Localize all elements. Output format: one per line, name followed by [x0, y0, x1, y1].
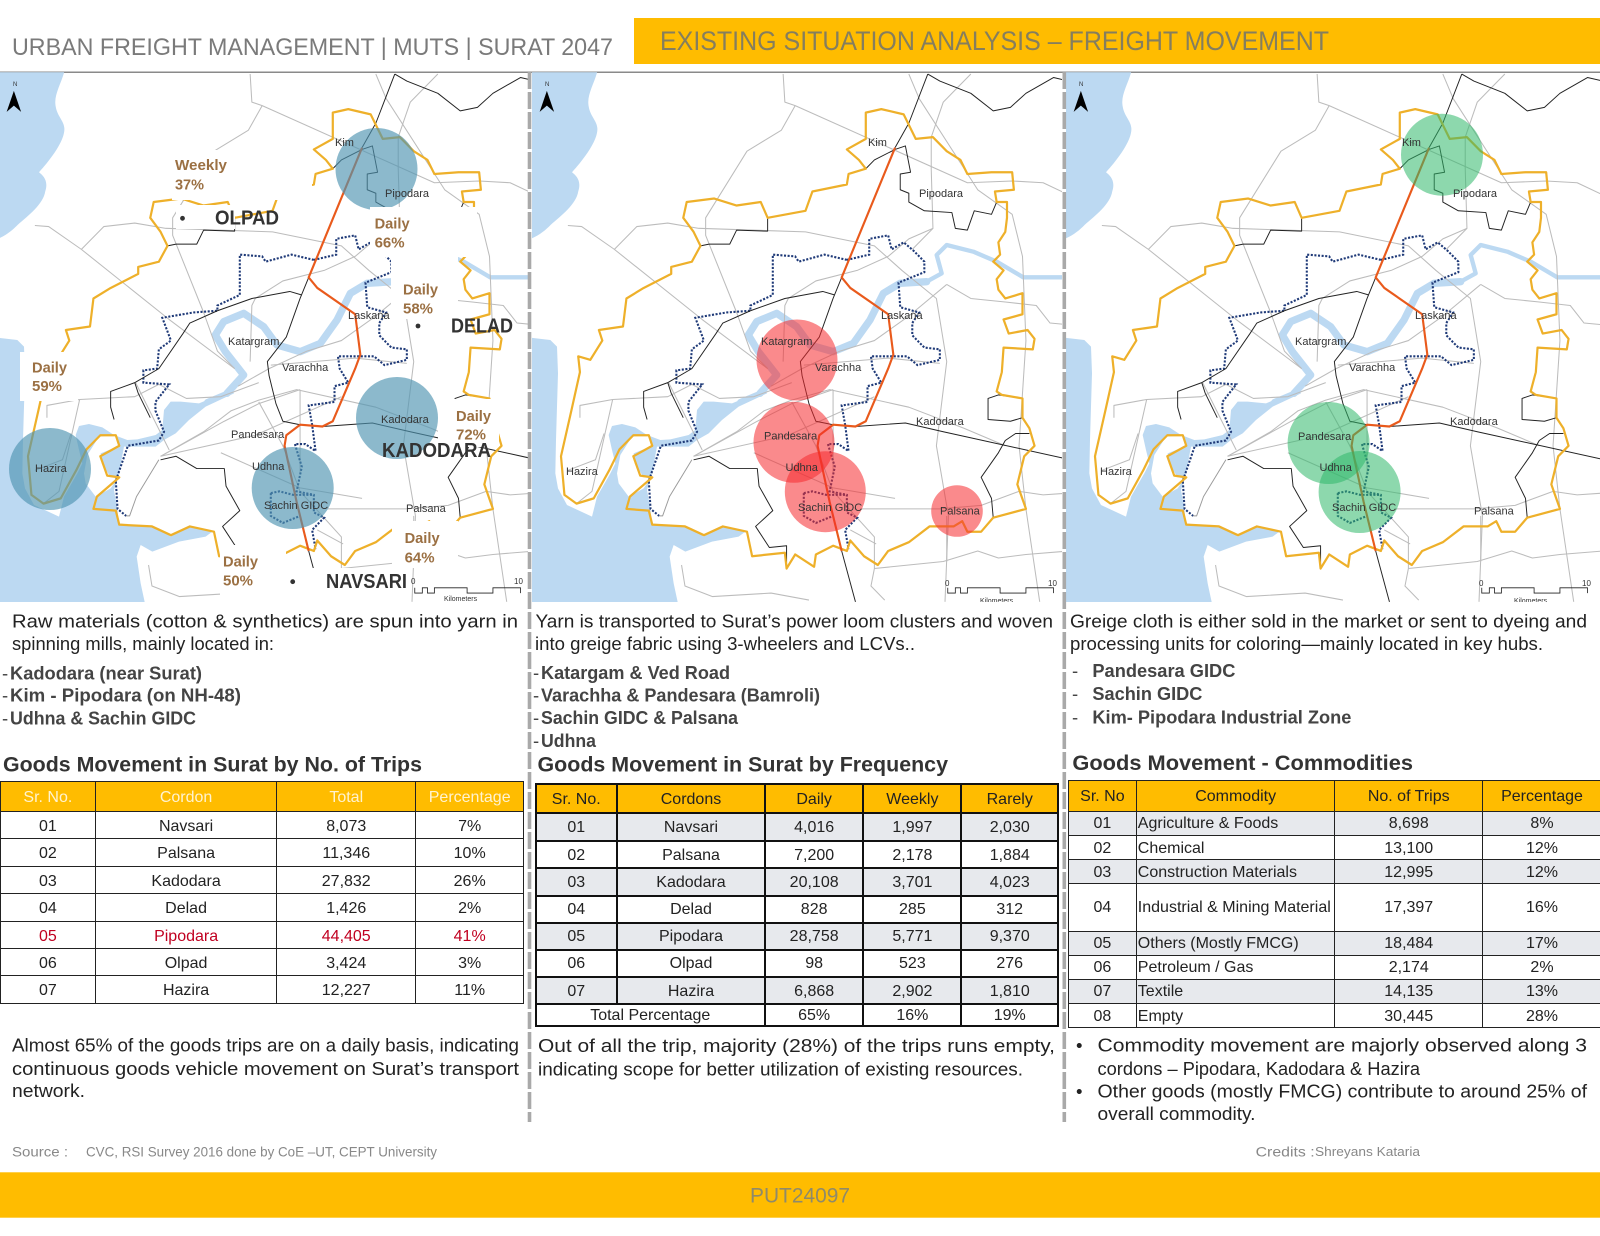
- map labels: [35, 137, 447, 515]
- frequency labels: 64%: [405, 550, 435, 567]
- table: goods movement by frequency: 1,810: [990, 983, 1030, 1000]
- cordon names: KADODARA: [382, 440, 491, 462]
- table: goods movement by frequency: 06: [567, 955, 585, 972]
- section header band: EXISTING SITUATION ANALYSIS – FREIGHT MOVEMENT: [660, 26, 1329, 56]
- scale bar text: [1479, 580, 1591, 602]
- frequency labels: Daily: [456, 408, 492, 425]
- scale bar text: 0: [1479, 579, 1484, 588]
- table: goods movement by trips: 02: [39, 845, 57, 862]
- text block: daily trips note: continuous goods vehicle movement on Surat’s transport: [12, 1058, 519, 1079]
- list: weaving locations: Katargam & Ved Road: [541, 662, 730, 683]
- frequency labels: 66%: [375, 234, 405, 252]
- list: weaving locations: -: [533, 707, 539, 728]
- table: goods movement by frequency: Navsari: [664, 819, 718, 836]
- text block: empty trips note: Out of all the trip, majority (28%) of the trips runs empty,: [538, 1035, 1055, 1056]
- table: goods movement by frequency: 4,016: [794, 819, 834, 836]
- map labels: Hazira: [35, 463, 68, 475]
- map labels: Kadodara: [1450, 416, 1499, 428]
- text block: greige cloth: processing units for coloring—mainly located in key hubs.: [1070, 633, 1543, 654]
- list: processing hubs: Kim- Pipodara Industrial Zone: [1092, 706, 1351, 728]
- map labels: Pipodara: [919, 188, 964, 200]
- map labels: Laskana: [1415, 310, 1457, 322]
- table: goods movement by trips: 27,832: [322, 873, 371, 890]
- table: goods movement by frequency: 20,108: [790, 874, 839, 891]
- title: URBAN FREIGHT MANAGEMENT | MUTS | SURAT 2047: [12, 34, 613, 61]
- panel: map 2 weaving clusters: N: [545, 82, 549, 88]
- scale bar text: 10: [514, 577, 523, 586]
- table: goods movement by frequency: 98: [805, 955, 823, 972]
- map labels: Katargram: [228, 336, 279, 348]
- list: spinning locations: -: [2, 707, 8, 728]
- footer band: PUT24097: [750, 1185, 850, 1208]
- scale bar text: 10: [1582, 579, 1591, 588]
- table: commodities: 17,397: [1384, 899, 1433, 916]
- frequency labels: Weekly: [175, 157, 228, 174]
- table: goods movement by frequency: 276: [996, 955, 1023, 972]
- frequency labels: 37%: [175, 176, 204, 194]
- map labels: [566, 137, 981, 518]
- table: goods movement by frequency: 1,884: [990, 847, 1030, 864]
- table: goods movement by trips: 44,405: [322, 928, 371, 945]
- table: goods movement by trips: 04: [39, 900, 57, 917]
- table: commodities: Industrial & Mining Material: [1138, 899, 1331, 916]
- map labels: Laskana: [881, 310, 923, 322]
- table: commodities: No. of Trips: [1368, 788, 1450, 805]
- table: goods movement by trips: 41%: [454, 928, 486, 945]
- map labels: Kim: [868, 137, 887, 149]
- table: commodities: 13%: [1526, 983, 1558, 1000]
- table: goods movement by frequency: 285: [899, 901, 926, 918]
- table: goods movement by frequency: 03: [567, 874, 585, 891]
- table: goods movement by frequency: Delad: [670, 901, 712, 918]
- text block: greige cloth: Greige cloth is either sold in the market or sent to dyeing and: [1070, 611, 1587, 632]
- map labels: Hazira: [566, 466, 599, 478]
- table: goods movement by frequency: Palsana: [662, 847, 720, 864]
- table: goods movement by trips: 01: [39, 818, 57, 835]
- list: weaving locations: -: [533, 730, 539, 751]
- table: goods movement by frequency: Kadodara: [656, 874, 726, 891]
- panel: map 1 frequency by cordon: [0, 72, 544, 607]
- map labels: Kadodara: [916, 416, 965, 428]
- table: goods movement by frequency: Sr. No.: [552, 791, 601, 808]
- table: commodities: 02: [1094, 840, 1111, 857]
- map labels: Kadodara: [381, 414, 430, 426]
- table: goods movement by trips: 26%: [454, 873, 486, 890]
- scale bar text: [411, 578, 523, 601]
- text block: empty trips note: indicating scope for better utilization of existing resources.: [538, 1059, 1023, 1080]
- cordon names: NAVSARI: [326, 571, 407, 593]
- text block: commodity notes: •: [1076, 1035, 1082, 1056]
- table: commodities: 13,100: [1384, 840, 1433, 857]
- list: processing hubs: -: [1072, 706, 1078, 728]
- map labels: Varachha: [815, 362, 862, 374]
- table: goods movement by frequency: 1,997: [892, 819, 932, 836]
- table: goods movement by frequency: Daily: [796, 791, 832, 808]
- text block: empty trips note: [538, 1035, 1055, 1080]
- cordon names: OLPAD: [215, 208, 279, 230]
- list: weaving locations: [533, 662, 820, 751]
- credits: Credits :: [1256, 1144, 1315, 1160]
- frequency labels: 58%: [403, 301, 433, 318]
- table: goods movement by frequency: 01: [567, 819, 585, 836]
- credits: Shreyans Kataria: [1315, 1144, 1421, 1159]
- map labels: Udhna: [252, 461, 285, 473]
- table: goods movement by frequency: 312: [996, 901, 1023, 918]
- text block: commodity notes: Other goods (mostly FMCG) contribute to around 25% of: [1098, 1081, 1588, 1102]
- map labels: Pandesara: [231, 429, 285, 441]
- panel: map 3 processing hubs: [1054, 72, 1600, 607]
- map labels: Kim: [1402, 137, 1421, 149]
- heading: trips table: Goods Movement in Surat by No. of Trips: [3, 753, 422, 777]
- table: commodities: 03: [1094, 864, 1111, 881]
- credits: [1256, 1144, 1421, 1160]
- table: goods movement by frequency: Pipodara: [659, 928, 723, 945]
- table: goods movement by trips: Cordon: [160, 788, 212, 806]
- table: commodities: Commodity: [1195, 788, 1276, 805]
- table: goods movement by frequency: 04: [567, 901, 585, 918]
- table: commodities: Construction Materials: [1138, 864, 1297, 881]
- table: goods movement by frequency: 02: [567, 847, 585, 864]
- table: goods movement by frequency: 07: [567, 983, 585, 1000]
- green hub circles: [1288, 114, 1483, 533]
- map labels: Sachin GIDC: [1332, 502, 1396, 514]
- table: goods movement by frequency: 523: [899, 955, 926, 972]
- white label backgrounds: [20, 150, 499, 602]
- table: goods movement by frequency: 5,771: [892, 928, 932, 945]
- table: goods movement by trips: 11%: [454, 982, 485, 999]
- table: goods movement by frequency: 3,701: [892, 874, 932, 891]
- table: goods movement by frequency: 65%: [798, 1007, 830, 1024]
- table: goods movement by frequency: 05: [567, 928, 585, 945]
- table: goods movement by frequency: 2,178: [892, 847, 932, 864]
- table: goods movement by frequency: Olpad: [670, 955, 712, 972]
- table: goods movement by trips: 2%: [458, 900, 481, 917]
- heading: frequency table: Goods Movement in Surat by Frequency: [538, 753, 948, 777]
- list: weaving locations: -: [533, 662, 539, 683]
- table: goods movement by frequency: [535, 783, 1059, 1027]
- map labels: Hazira: [1100, 466, 1133, 478]
- list: processing hubs: Pandesara GIDC: [1092, 660, 1235, 681]
- heading: commodities table: Goods Movement - Commodities: [1072, 751, 1413, 775]
- text block: commodity notes: [1076, 1035, 1588, 1124]
- frequency labels: 59%: [32, 378, 62, 395]
- table: goods movement by trips: Delad: [165, 900, 207, 917]
- table: goods movement by trips: 06: [39, 955, 57, 972]
- table: goods movement by trips: 03: [39, 873, 57, 890]
- list: spinning locations: -: [2, 662, 8, 683]
- map labels: Katargram: [1295, 336, 1346, 348]
- list: weaving locations: Sachin GIDC & Palsana: [541, 707, 739, 728]
- map labels: Katargram: [761, 336, 812, 348]
- list: weaving locations: Varachha & Pandesara (Bamroli): [541, 684, 820, 706]
- text block: daily trips note: [12, 1035, 519, 1101]
- table: goods movement by trips: [0, 781, 524, 1004]
- frequency labels: Daily: [223, 554, 259, 570]
- table: goods movement by frequency: 7,200: [794, 847, 834, 864]
- map labels: Palsana: [406, 503, 447, 515]
- map labels: Varachha: [282, 362, 329, 374]
- table: commodities: 07: [1094, 983, 1111, 1000]
- map labels: Laskana: [348, 310, 390, 322]
- table: commodities: Others (Mostly FMCG): [1138, 935, 1299, 952]
- table: commodities: 8,698: [1389, 815, 1429, 832]
- table: goods movement by frequency: Total Percentage: [590, 1007, 710, 1024]
- source note: CVC, RSI Survey 2016 done by CoE –UT, CEPT University: [86, 1144, 437, 1160]
- list: processing hubs: Sachin GIDC: [1092, 683, 1202, 704]
- map labels: Palsana: [940, 506, 981, 518]
- table: goods movement by frequency: 828: [801, 901, 828, 918]
- text block: yarn transport: [535, 611, 1053, 654]
- table: goods movement by trips: 12,227: [322, 982, 371, 999]
- table: goods movement by frequency: 6,868: [794, 983, 834, 1000]
- source note: Source :: [12, 1144, 68, 1160]
- list: weaving locations: -: [533, 684, 539, 706]
- table: commodities: Percentage: [1501, 788, 1583, 805]
- map labels: Varachha: [1349, 362, 1396, 374]
- table: goods movement by frequency: Hazira: [668, 983, 714, 1000]
- table: commodities: Empty: [1138, 1008, 1183, 1025]
- frequency labels: Daily: [375, 215, 410, 232]
- table: goods movement by frequency: 2,902: [892, 983, 932, 1000]
- table: goods movement by trips: Navsari: [159, 818, 213, 835]
- section header band: [634, 18, 1600, 64]
- blue cordon circles: [9, 128, 438, 529]
- table: commodities: 08: [1094, 1008, 1111, 1025]
- scale bar text: Kilometers: [1514, 598, 1548, 605]
- table: commodities: Chemical: [1138, 840, 1204, 857]
- list: spinning locations: [2, 662, 241, 728]
- scale bar text: 0: [411, 577, 416, 586]
- table: goods movement by trips: Olpad: [165, 955, 207, 972]
- list: spinning locations: -: [2, 685, 8, 706]
- table: commodities: 14,135: [1384, 983, 1433, 1000]
- cordon names: DELAD: [451, 316, 513, 338]
- list: processing hubs: -: [1072, 683, 1078, 704]
- map labels: Udhna: [786, 462, 819, 474]
- map labels: Sachin GIDC: [264, 500, 328, 512]
- table: commodities: 17%: [1526, 935, 1558, 952]
- table: goods movement by trips: Percentage: [429, 788, 511, 806]
- scale bar text: Kilometers: [980, 598, 1014, 605]
- scale bar text: [945, 580, 1057, 602]
- table: commodities: 2%: [1530, 959, 1554, 976]
- scale bar text: Kilometers: [444, 596, 478, 603]
- table: commodities: Petroleum / Gas: [1138, 959, 1253, 976]
- frequency labels: Daily: [405, 530, 440, 547]
- panel: map 2 weaving clusters: [520, 72, 1077, 607]
- text block: commodity notes: overall commodity.: [1098, 1103, 1256, 1124]
- table: goods movement by trips: 07: [39, 982, 57, 999]
- table: goods movement by trips: Sr. No.: [23, 788, 72, 806]
- table: goods movement by trips: 1,426: [326, 900, 366, 917]
- table: commodities: Sr. No: [1080, 788, 1125, 805]
- red cluster circles: [754, 320, 983, 537]
- table: goods movement by frequency: Weekly: [886, 791, 938, 808]
- cordon names: [180, 208, 513, 593]
- text block: yarn transport: Yarn is transported to Surat’s power loom clusters and woven: [536, 611, 1053, 632]
- table: commodities: 18,484: [1384, 935, 1433, 952]
- text block: yarn transport: into greige fabric using 3-wheelers and LCVs..: [535, 633, 915, 654]
- table: goods movement by trips: 3%: [458, 955, 481, 972]
- text block: raw materials: Raw materials (cotton & synthetics) are spun into yarn in: [12, 611, 518, 632]
- table: goods movement by trips: Total: [329, 788, 363, 806]
- table: commodities: 16%: [1526, 899, 1558, 916]
- table: commodities: 12%: [1526, 864, 1558, 881]
- table: goods movement by trips: Pipodara: [154, 928, 218, 945]
- scale bar text: 0: [945, 579, 950, 588]
- table: goods movement by trips: Hazira: [163, 982, 209, 999]
- map labels: Pipodara: [1453, 188, 1498, 200]
- list: processing hubs: [1072, 660, 1351, 728]
- table: goods movement by frequency: 19%: [994, 1007, 1026, 1024]
- map labels: Kim: [335, 137, 354, 149]
- table: commodities: 2,174: [1389, 959, 1429, 976]
- text block: greige cloth: [1070, 611, 1587, 654]
- text block: daily trips note: Almost 65% of the goods trips are on a daily basis, indicating: [12, 1035, 519, 1056]
- table: goods movement by trips: 11,346: [322, 845, 370, 862]
- table: goods movement by trips: 10%: [454, 845, 486, 862]
- scale bar text: 10: [1048, 579, 1057, 588]
- frequency labels: Daily: [403, 282, 439, 298]
- list: weaving locations: Udhna: [541, 730, 597, 751]
- frequency labels: Daily: [32, 359, 68, 376]
- table: goods movement by trips: 05: [39, 928, 57, 945]
- list: spinning locations: Kadodara (near Surat): [10, 662, 202, 683]
- text block: raw materials: [12, 611, 518, 654]
- footer band: [0, 1172, 1600, 1218]
- map labels: Pipodara: [385, 188, 430, 200]
- text block: commodity notes: cordons – Pipodara, Kadodara & Hazira: [1098, 1058, 1421, 1079]
- table: commodities: 06: [1094, 959, 1111, 976]
- map labels: Udhna: [1320, 462, 1353, 474]
- text block: commodity notes: •: [1076, 1081, 1082, 1102]
- text block: commodity notes: Commodity movement are majorly observed along 3: [1098, 1035, 1587, 1056]
- map labels: [1100, 137, 1515, 518]
- map labels: Palsana: [1474, 506, 1515, 518]
- table: goods movement by frequency: 9,370: [990, 928, 1030, 945]
- map labels: Pandesara: [1298, 431, 1352, 443]
- table: commodities: 05: [1094, 935, 1111, 952]
- table: goods movement by frequency: Cordons: [661, 791, 721, 808]
- table: commodities: [1068, 780, 1600, 1028]
- table: goods movement by trips: Kadodara: [151, 873, 221, 890]
- text block: daily trips note: network.: [12, 1080, 85, 1101]
- table: goods movement by frequency: 2,030: [990, 819, 1030, 836]
- list: spinning locations: Kim - Pipodara (on NH-48): [10, 685, 241, 706]
- panel: map 3 processing hubs: N: [1079, 82, 1083, 88]
- table: goods movement by frequency: Rarely: [987, 791, 1033, 808]
- map labels: Pandesara: [764, 430, 818, 442]
- table: goods movement by frequency: 4,023: [990, 874, 1030, 891]
- table: commodities: 28%: [1526, 1008, 1558, 1025]
- frequency labels: 72%: [456, 427, 486, 444]
- table: goods movement by trips: 7%: [458, 818, 481, 835]
- panel: map 1 frequency by cordon: N: [13, 82, 17, 88]
- table: commodities: 12%: [1526, 840, 1558, 857]
- frequency labels: 50%: [223, 573, 253, 590]
- table: goods movement by frequency: 28,758: [790, 928, 839, 945]
- table: commodities: 30,445: [1384, 1008, 1433, 1025]
- table: goods movement by frequency: 16%: [896, 1007, 928, 1024]
- table: commodities: Agriculture & Foods: [1138, 815, 1278, 832]
- table: goods movement by trips: 8,073: [326, 818, 366, 835]
- map labels: Sachin GIDC: [798, 502, 862, 514]
- text block: raw materials: spinning mills, mainly located in:: [12, 633, 274, 654]
- table: commodities: 12,995: [1384, 864, 1433, 881]
- table: goods movement by trips: Palsana: [157, 845, 215, 862]
- table: commodities: 8%: [1530, 815, 1554, 832]
- table: goods movement by trips: 3,424: [326, 955, 366, 972]
- table: commodities: 01: [1094, 815, 1111, 832]
- frequency labels: [32, 157, 492, 590]
- table: commodities: 04: [1094, 899, 1111, 916]
- table: commodities: Textile: [1138, 983, 1183, 1000]
- list: processing hubs: -: [1072, 660, 1078, 681]
- list: spinning locations: Udhna & Sachin GIDC: [10, 707, 196, 728]
